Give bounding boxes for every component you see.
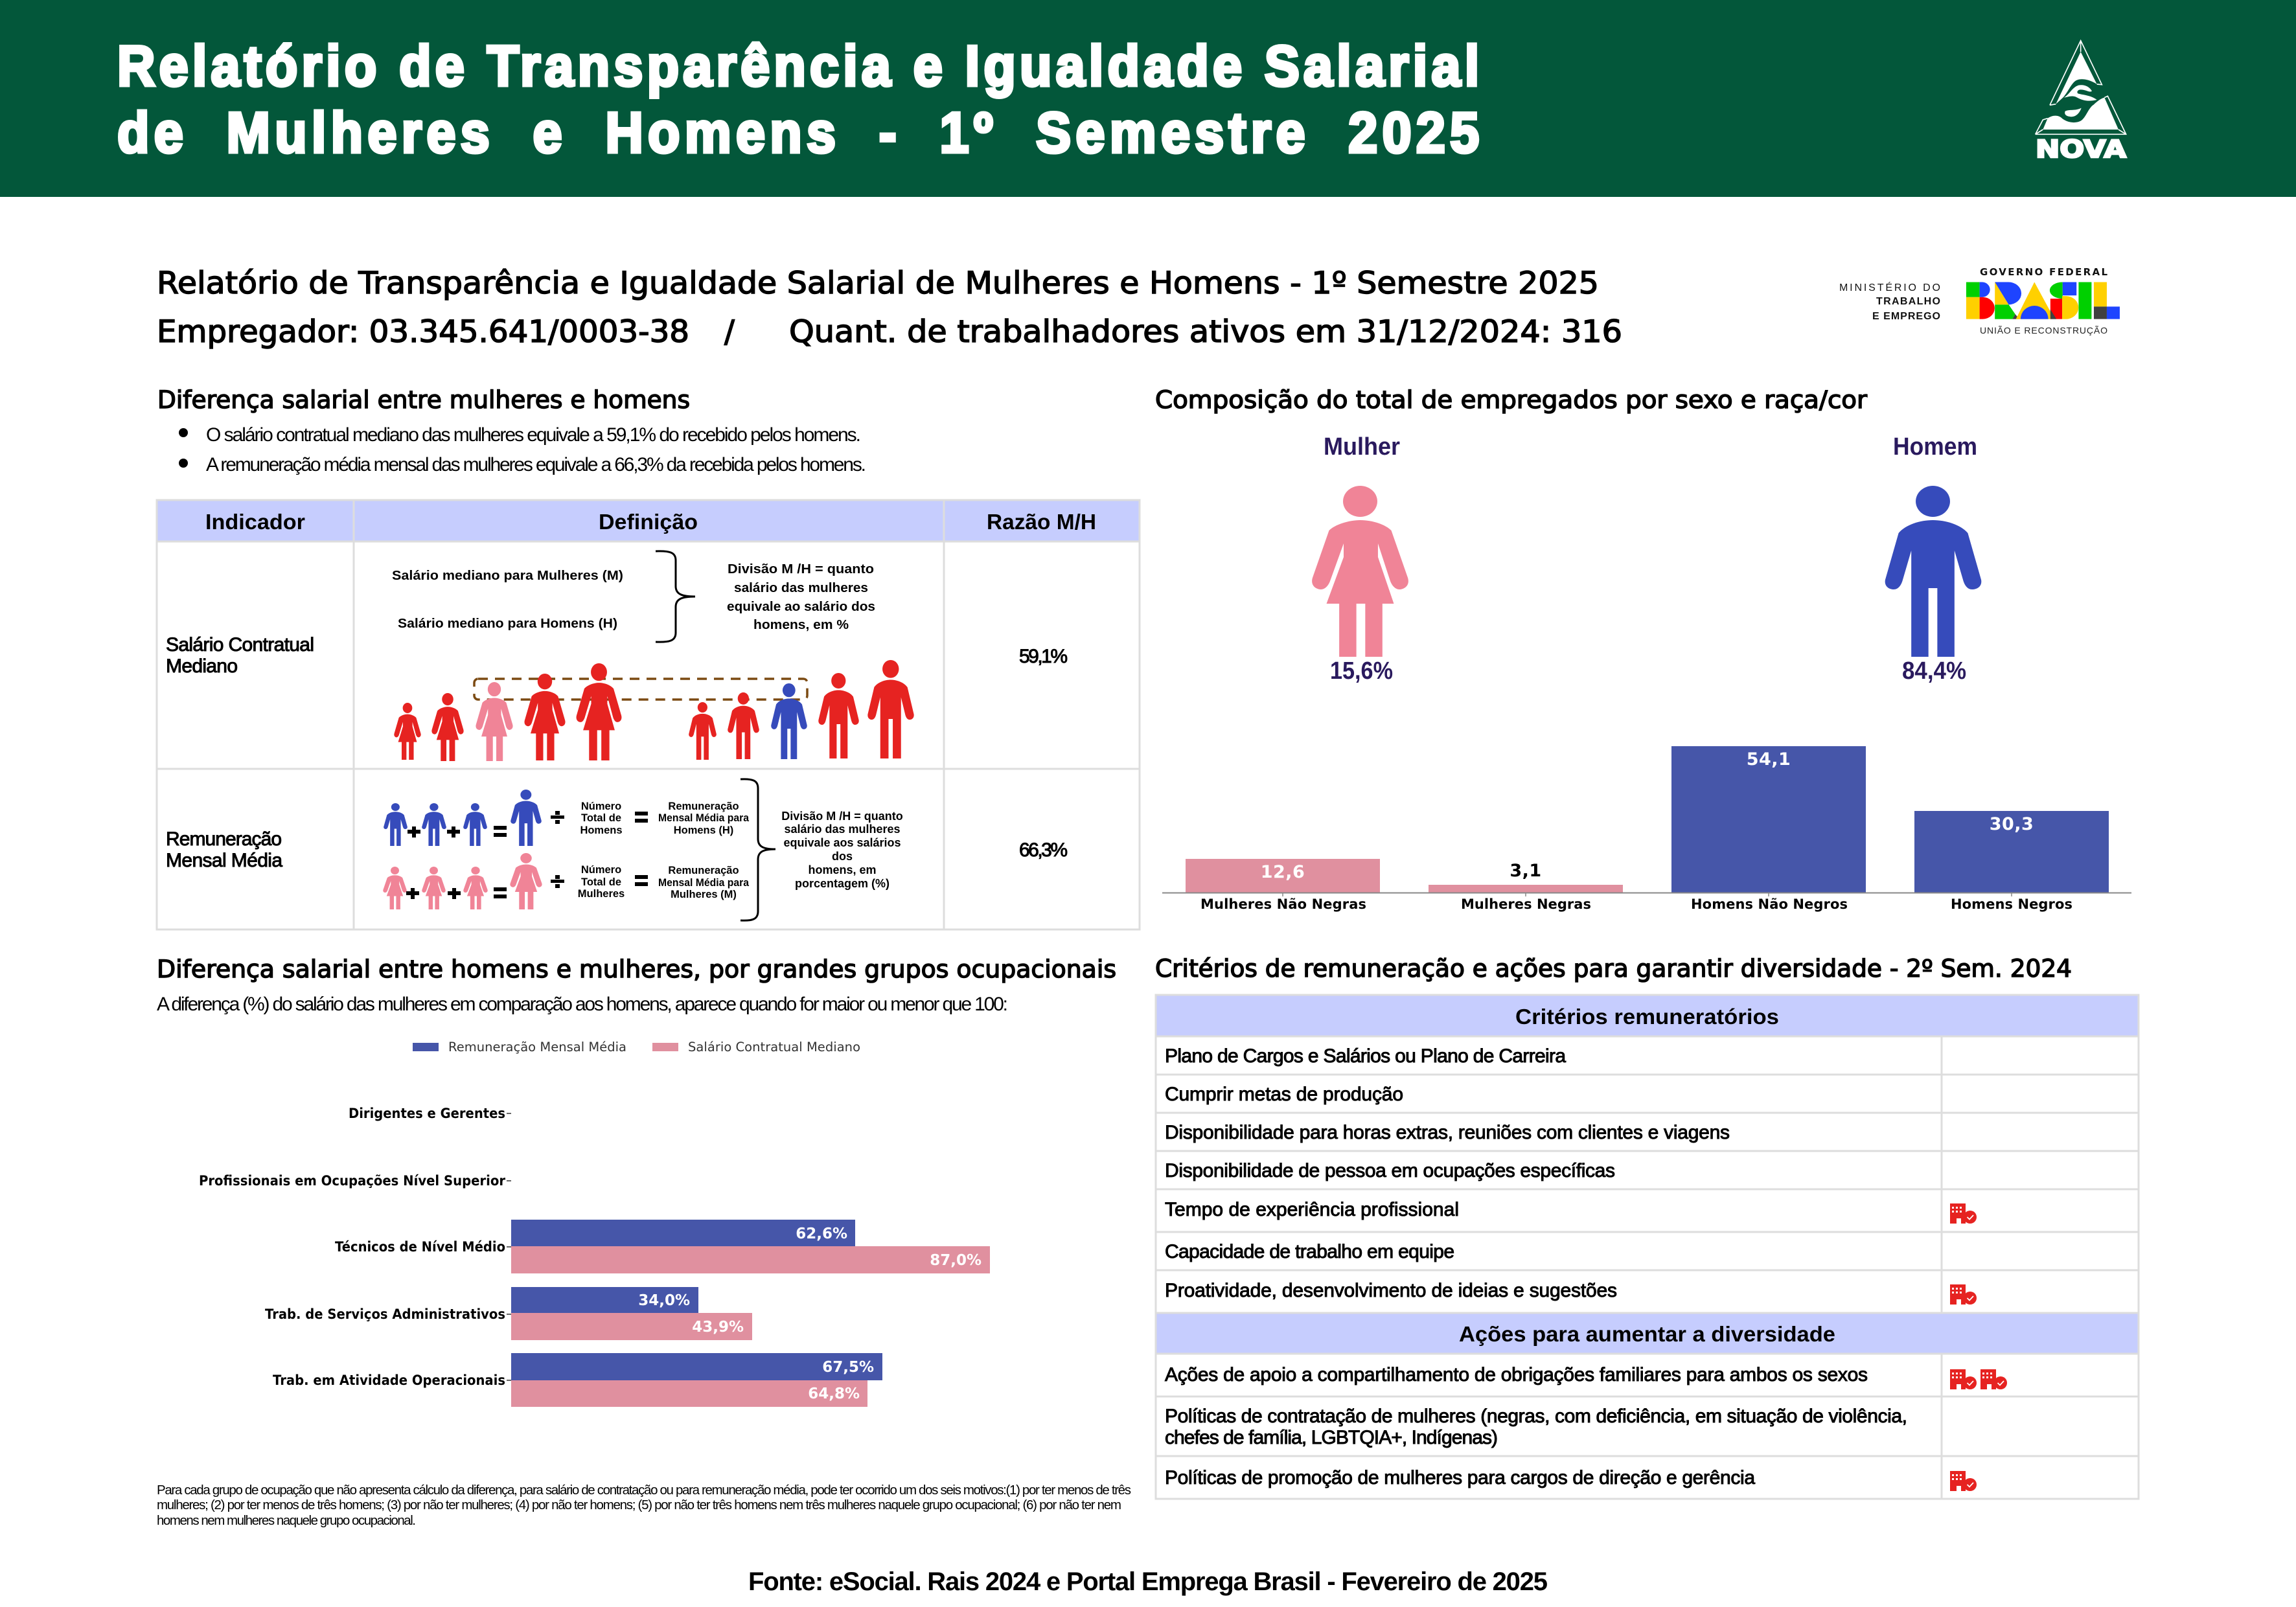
formula: men: Mensal Média para	[658, 812, 750, 824]
report heading: Relatório de Transparência e Igualdade Salarial de Mulheres e Homens - 1º Semestre 2025	[157, 266, 1599, 301]
panel: criteria table	[1156, 995, 2139, 1499]
formula: women: Mulheres (M)	[671, 889, 737, 900]
definition texts: salário: salário das mulheres	[734, 581, 868, 595]
figures: men	[689, 660, 914, 760]
criteria rows: Plano de Cargos e Salários ou Plano de Carreira	[1165, 1045, 1566, 1067]
definition texts: salário: Salário mediano para Homens (H)	[398, 617, 617, 631]
bar chart: composition	[1162, 746, 2131, 912]
definition texts: salário: equivale ao salário dos	[727, 600, 875, 614]
logo: governo federal: GOVERNO FEDERAL	[1980, 266, 2107, 278]
brace	[656, 551, 695, 642]
definition texts: salário: homens, em %	[753, 618, 849, 632]
row label: remuneração: Mensal Média	[166, 850, 282, 871]
bullets	[179, 424, 866, 475]
formula: men: Total de	[581, 812, 621, 824]
criteria rows: Tempo de experiência profissional	[1165, 1199, 1459, 1220]
header band	[0, 0, 2296, 197]
bar chart: occupational groups: Trab. de Serviços Administrativos	[265, 1306, 505, 1322]
source: Fonte: eSocial. Rais 2024 e Portal Emprega Brasil - Fevereiro de 2025	[748, 1567, 1548, 1596]
section heading: criteria: Critérios de remuneração e ações para garantir diversidade - 2º Sem. 2024	[1155, 955, 2072, 983]
bar chart: composition: Homens Negros	[1951, 896, 2072, 912]
logo: NOVA	[2036, 41, 2126, 163]
definition texts: salário	[392, 562, 875, 632]
report heading: /	[724, 314, 735, 350]
formula: men: Remuneração	[668, 801, 739, 812]
title: de Mulheres e Homens - 1º Semestre 2025	[117, 100, 1479, 165]
legend: Salário Contratual Mediano	[688, 1040, 860, 1054]
definition texts: salário: Salário mediano para Mulheres (M)	[392, 569, 623, 583]
criteria rows: Proatividade, desenvolvimento de ideias e sugestões	[1165, 1280, 1617, 1301]
logo: governo federal	[1966, 266, 2120, 336]
subtitle: A diferença (%) do salário das mulheres em comparação aos homens, aparece quando for maior ou menor que 100:	[157, 994, 1008, 1015]
legend	[413, 1040, 860, 1054]
bar chart: composition: Homens Não Negros	[1691, 896, 1848, 912]
report heading: Empregador: 03.345.641/0003-38	[157, 314, 689, 350]
table header: criteria: Critérios remuneratórios	[1515, 1005, 1779, 1029]
bar chart: composition: 54,1	[1747, 749, 1791, 769]
logo: ministério	[1839, 281, 1940, 322]
diversity rows: Políticas de contratação de mulheres (negras, com deficiência, em situação de violência,	[1165, 1406, 1907, 1427]
footnote	[157, 1483, 1131, 1528]
logo: ministério: TRABALHO	[1876, 296, 1940, 307]
bar chart: occupational groups: Técnicos de Nível Médio	[335, 1239, 505, 1255]
row label: remuneração	[166, 828, 282, 871]
diversity rows: Ações de apoio a compartilhamento de obrigações familiares para ambos os sexos	[1165, 1364, 1868, 1385]
formula: women: Mulheres	[578, 888, 625, 900]
bar chart: composition: Mulheres Não Negras	[1200, 896, 1366, 912]
definition text: remuneração: dos	[832, 850, 853, 863]
footnote: mulheres; (2) por ter menos de três homens; (3) por não ter mulheres; (4) por não ter homens; (5) por não ter três homens nem três mulheres naquele grupo ocupacional; (6) por não ter nem	[157, 1498, 1121, 1512]
bar chart: occupational groups: Trab. em Atividade Operacionais	[273, 1373, 505, 1388]
panel: man share	[1885, 433, 1981, 685]
formula: men	[384, 790, 750, 846]
title	[117, 34, 1479, 165]
row label: salário: Mediano	[166, 655, 238, 677]
bar chart: composition: 30,3	[1990, 814, 2034, 834]
section heading: wage gap: Diferença salarial entre mulheres e homens	[157, 386, 690, 414]
footnote: homens nem mulheres naquele grupo ocupacional.	[157, 1513, 416, 1528]
logo: ministério: E EMPREGO	[1872, 311, 1940, 322]
bar chart: occupational groups: 43,9%	[692, 1319, 744, 1336]
logo: ministério: MINISTÉRIO DO	[1839, 281, 1940, 293]
panel: man share: Homem	[1893, 433, 1977, 461]
table header: diversity: Ações para aumentar a diversidade	[1459, 1322, 1835, 1346]
formula: women: Número	[581, 864, 621, 876]
bar chart: occupational groups: Profissionais em Ocupações Nível Superior	[199, 1173, 506, 1189]
logo: governo federal: UNIÃO E RECONSTRUÇÃO	[1980, 325, 2107, 336]
section heading: composition: Composição do total de empregados por sexo e raça/cor	[1155, 386, 1868, 414]
definition text: remuneração: homens, em	[808, 863, 877, 876]
bar chart: occupational groups: 34,0%	[638, 1292, 690, 1309]
diversity rows	[1165, 1364, 1907, 1488]
panel: woman share: 15,6%	[1330, 657, 1393, 685]
diversity rows: chefes de família, LGBTQIA+, Indígenas)	[1165, 1427, 1498, 1448]
icons: company check	[1950, 1203, 2007, 1491]
bar chart: occupational groups: 87,0%	[930, 1252, 982, 1269]
table header: Razão M/H	[987, 510, 1096, 534]
footnote: Para cada grupo de ocupação que não apresenta cálculo da diferença, para salário de contratação ou para remuneração média, pode ter ocorrido um dos seis motivos:(1) por ter menos de três	[157, 1483, 1131, 1498]
row label: remuneração: Remuneração	[166, 828, 282, 850]
criteria rows: Capacidade de trabalho em equipe	[1165, 1241, 1454, 1262]
bar chart: composition: Mulheres Negras	[1461, 896, 1591, 912]
title: Relatório de Transparência e Igualdade Salarial	[117, 34, 1479, 98]
logo: NOVA: NOVA	[2036, 135, 2126, 163]
criteria rows: Disponibilidade de pessoa em ocupações específicas	[1165, 1160, 1615, 1181]
legend: Remuneração Mensal Média	[448, 1040, 626, 1054]
row label: salário: Salário Contratual	[166, 634, 314, 655]
report heading: Quant. de trabalhadores ativos em 31/12/2024: 316	[789, 314, 1622, 350]
report heading	[157, 266, 1622, 350]
definition text: remuneração: Divisão M /H = quanto	[781, 810, 903, 823]
bar chart: occupational groups	[199, 1106, 990, 1407]
bar chart: occupational groups: 62,6%	[796, 1225, 847, 1242]
criteria rows: Cumprir metas de produção	[1165, 1084, 1403, 1105]
ratio values: 66,3%	[1019, 839, 1068, 861]
definition text: remuneração: equivale aos salários	[783, 836, 901, 849]
formula: women: Total de	[581, 876, 621, 888]
definition texts: salário: Divisão M /H = quanto	[728, 562, 874, 576]
formula: men: Número	[581, 801, 621, 812]
ratio values: 59,1%	[1019, 646, 1068, 667]
formula: men: Homens	[580, 825, 623, 836]
table header	[205, 510, 1096, 534]
section heading: occupational groups: Diferença salarial entre homens e mulheres, por grandes grupos ocupacionais	[157, 955, 1116, 983]
panel: indicator table	[157, 500, 1140, 929]
formula: women: Mensal Média para	[658, 877, 750, 889]
criteria rows: Disponibilidade para horas extras, reuniões com clientes e viagens	[1165, 1122, 1730, 1143]
formula: men: Homens (H)	[674, 825, 733, 836]
bar chart: occupational groups: 67,5%	[822, 1359, 874, 1376]
panel: man share: 84,4%	[1902, 657, 1966, 685]
formula: women	[383, 853, 750, 909]
table header: Definição	[599, 510, 698, 534]
definition text: remuneração: salário das mulheres	[784, 823, 901, 836]
bullets: A remuneração média mensal das mulheres equivale a 66,3% da recebida pelos homens.	[206, 454, 866, 475]
bullets: O salário contratual mediano das mulheres equivale a 59,1% do recebido pelos homens.	[206, 424, 861, 446]
criteria rows	[1165, 1045, 1730, 1301]
dashed median box	[474, 679, 807, 700]
panel: woman share: Mulher	[1324, 433, 1400, 461]
definition text: remuneração	[781, 810, 903, 890]
figures: women	[394, 663, 621, 761]
table header: Indicador	[205, 510, 305, 534]
ratio values	[1019, 646, 1068, 861]
row label: salário	[166, 634, 314, 677]
bar chart: composition: 12,6	[1261, 862, 1305, 882]
definition text: remuneração: porcentagem (%)	[795, 877, 890, 890]
formula: women: Remuneração	[668, 865, 739, 876]
bar chart: occupational groups: 64,8%	[808, 1385, 860, 1402]
brace	[740, 779, 775, 920]
diversity rows: Políticas de promoção de mulheres para cargos de direção e gerência	[1165, 1467, 1755, 1488]
panel: woman share	[1312, 433, 1408, 685]
bar chart: occupational groups: Dirigentes e Gerentes	[349, 1106, 505, 1121]
bar chart: composition: 3,1	[1510, 861, 1542, 881]
